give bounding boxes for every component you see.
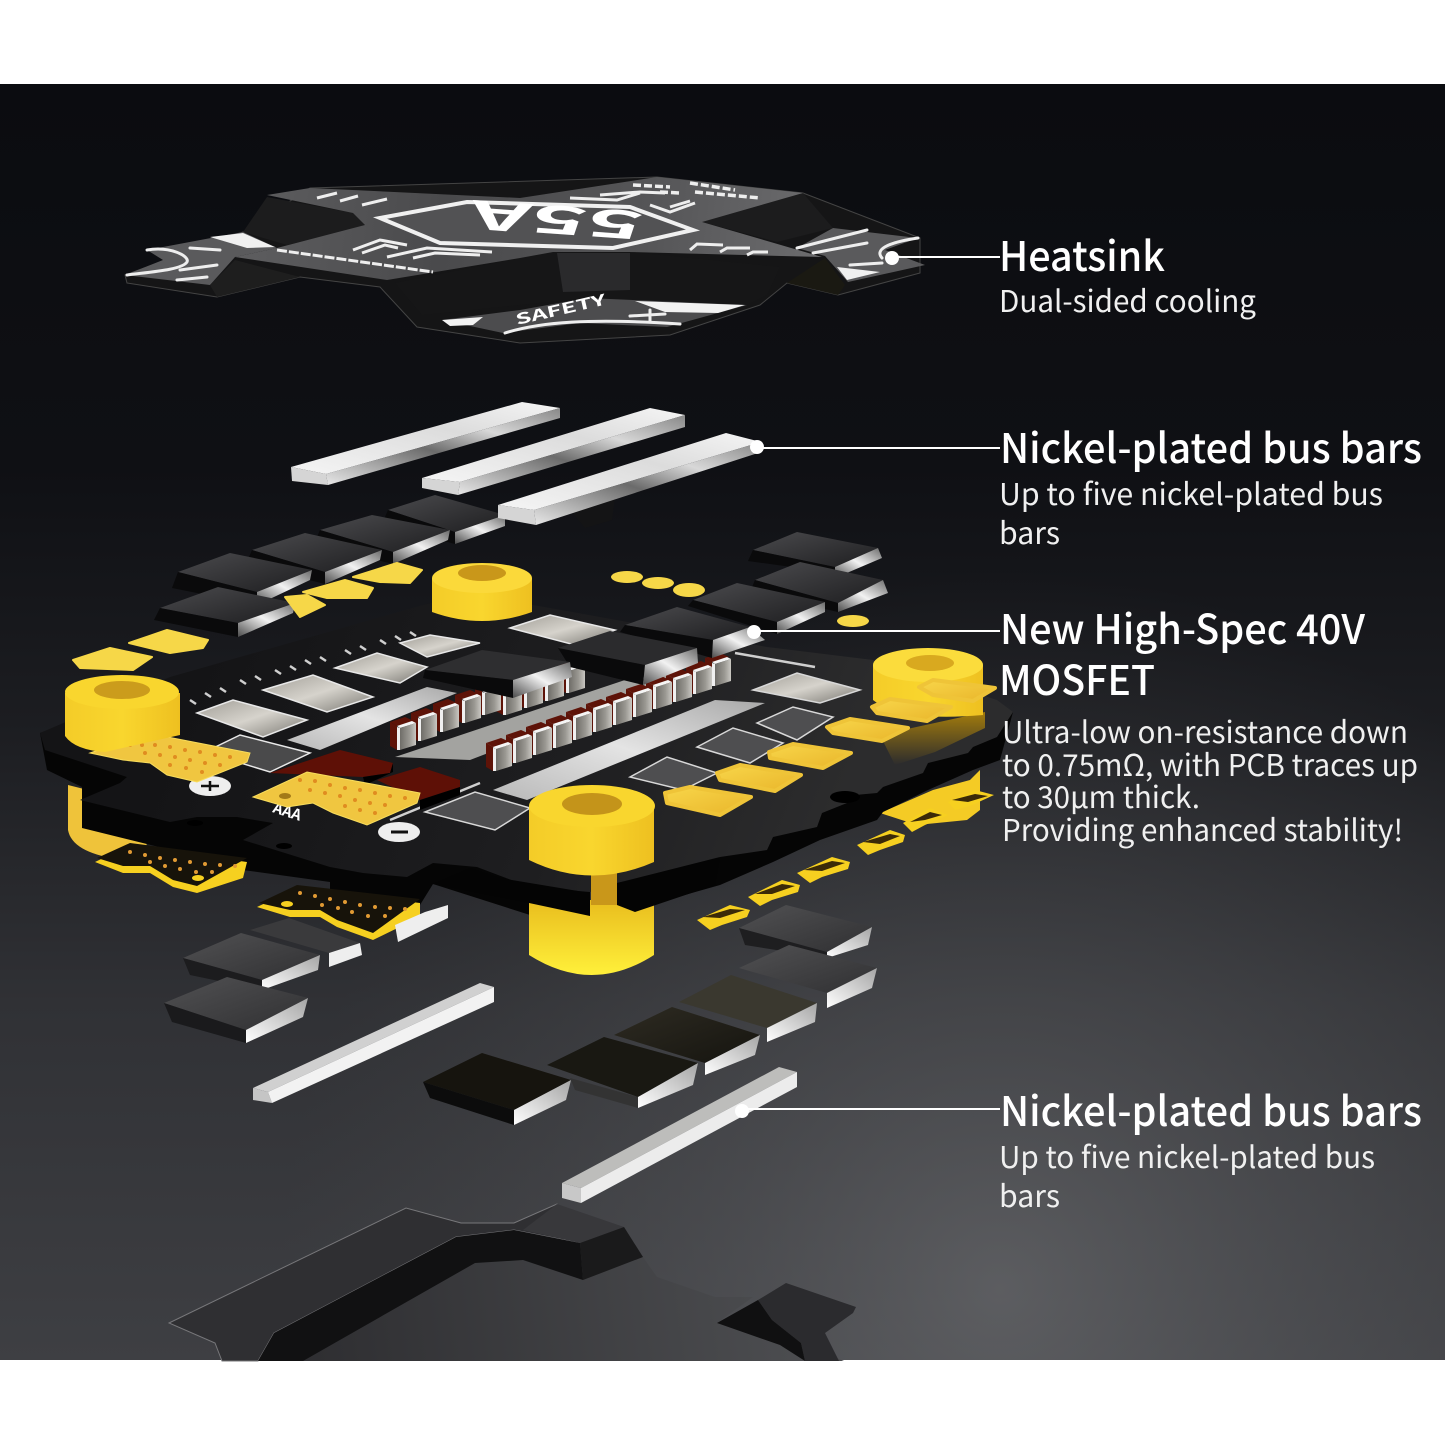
- MOSFET chip: [679, 975, 817, 1042]
- chevrons: [317, 192, 768, 258]
- left flange: [125, 232, 300, 297]
- front pit: [395, 252, 780, 315]
- callout: nickel-plated bus bars upper: [750, 415, 1422, 553]
- lower MOSFET chips left: [164, 905, 448, 1043]
- right gold pads: [665, 680, 995, 815]
- upper left MOSFET row: [154, 495, 505, 637]
- silk pad ticks: [190, 632, 815, 820]
- standoff left: [65, 675, 180, 752]
- bottom heatsink plate: [169, 1204, 856, 1361]
- MOSFET chip: [558, 631, 698, 685]
- lower body: [529, 900, 654, 975]
- left recess: [243, 197, 365, 245]
- gold mesh pad lower centre: [257, 885, 420, 940]
- plate silhouette: [125, 177, 920, 343]
- callout: MOSFET: [747, 596, 1418, 850]
- metal centre band: [395, 668, 710, 760]
- plate floor: [258, 1227, 844, 1361]
- upper right solder pads: [611, 571, 869, 627]
- MOSFET chip: [172, 553, 312, 605]
- leader line: [750, 440, 1000, 454]
- cross top face: [235, 177, 822, 280]
- neck: [591, 873, 617, 905]
- PCB side walls: [40, 603, 1013, 916]
- leader line: [885, 251, 1000, 265]
- capacitor row left: [390, 660, 585, 750]
- MOSFET chip: [547, 1037, 698, 1108]
- MOSFET chip: [739, 905, 872, 958]
- MOSFET chip: [620, 607, 765, 658]
- silver strip right: [493, 700, 765, 800]
- gold mesh pad lower left: [95, 843, 247, 893]
- callout: MOSFET: MOSFET: [999, 647, 1155, 707]
- upper bus bars: [291, 402, 685, 495]
- hexagon logo: [380, 189, 693, 256]
- bar 2: [422, 408, 685, 495]
- callout: heatsink: [885, 223, 1256, 321]
- heading: Nickel-plated bus bars: [1000, 415, 1422, 475]
- heading: Heatsink: [999, 223, 1165, 283]
- MOSFET chip: [250, 918, 362, 967]
- standoff back: [432, 563, 532, 621]
- heatsink top plate: [125, 177, 925, 343]
- callout: nickel-plated bus bars upper: bars: [999, 509, 1060, 553]
- MOSFET chip: [688, 583, 825, 634]
- 55A mark: 55A: [463, 189, 647, 256]
- right tab: [758, 1283, 856, 1361]
- plus marker: [189, 776, 231, 796]
- callout: MOSFET: to 30μm thick.: [1002, 773, 1200, 817]
- callout: nickel-plated bus bars lower: [735, 1078, 1422, 1216]
- MOSFET chip: [314, 515, 450, 564]
- yellow lead right: [880, 770, 980, 825]
- MOSFET chip: [739, 945, 877, 1008]
- callout: nickel-plated bus bars lower: bars: [999, 1172, 1060, 1216]
- capacitor row right: [486, 653, 731, 771]
- MOSFET chip: [183, 933, 320, 990]
- upper body: [529, 806, 654, 876]
- standoff right: [873, 648, 983, 717]
- tower top: [523, 1204, 624, 1243]
- description: Up to five nickel-plated bus: [999, 1133, 1375, 1177]
- lower bus bar right: [562, 1067, 797, 1203]
- silver strip left: [287, 687, 457, 750]
- MOSFET chip: [750, 562, 888, 612]
- PCB top surface: [40, 603, 1013, 892]
- plate flange: [169, 1204, 580, 1361]
- upper right MOSFET row: [748, 532, 888, 612]
- bar 1: [291, 402, 560, 485]
- band black: [433, 868, 590, 916]
- right flange: [787, 228, 925, 295]
- small gold pads lower: [697, 790, 994, 930]
- third upper bus bar: [498, 433, 761, 528]
- yellow lead left: [68, 785, 150, 859]
- MOSFET chip: [164, 977, 308, 1043]
- central MOSFET chips: [423, 583, 825, 698]
- AAA silk mark: AAA: [270, 796, 305, 826]
- top arm print: [633, 183, 760, 198]
- callout: MOSFET: Providing enhanced stability!: [1002, 806, 1403, 850]
- MOSFET chip: [246, 533, 382, 584]
- callout: MOSFET: to 0.75mΩ, with PCB traces up: [1002, 741, 1418, 785]
- MOSFET chip: [382, 495, 505, 544]
- front flange: [442, 289, 747, 333]
- small metal slivers: [395, 905, 448, 942]
- plate wall: [258, 1230, 583, 1361]
- tower face: [580, 1227, 643, 1280]
- MOSFET chip: [614, 1007, 760, 1075]
- gold reflection near right pillar: [880, 712, 985, 765]
- MOSFET chip: [423, 1053, 571, 1125]
- silver ICs right: [425, 673, 860, 830]
- leader line: [735, 1104, 1000, 1118]
- standoff front: [433, 785, 720, 975]
- red capacitors: [270, 750, 460, 810]
- MOSFET chip: [423, 650, 572, 698]
- PCB holes and screws: [187, 776, 860, 849]
- right recess: [702, 193, 833, 242]
- MOSFET chip: [748, 532, 882, 578]
- upper left solder pads: [73, 563, 422, 670]
- description: Dual-sided cooling: [999, 277, 1256, 321]
- description: Up to five nickel-plated bus: [999, 470, 1383, 514]
- front flange: SAFETY: [513, 289, 608, 330]
- description: Ultra-low on-resistance down: [1002, 708, 1408, 752]
- heading: New High-Spec 40V: [1000, 596, 1366, 656]
- gold mesh pad left: [90, 733, 250, 782]
- silver ICs left: [197, 615, 615, 772]
- lower bus bar left: [253, 983, 494, 1103]
- leader line: [747, 625, 1000, 639]
- PCB lower gold and under parts: [95, 790, 994, 940]
- gold mesh pad centre: [253, 772, 420, 825]
- minus marker: [378, 822, 420, 842]
- lower MOSFET chips right: [423, 905, 877, 1125]
- heading: Nickel-plated bus bars: [1000, 1078, 1422, 1138]
- MOSFET chip: [154, 587, 295, 637]
